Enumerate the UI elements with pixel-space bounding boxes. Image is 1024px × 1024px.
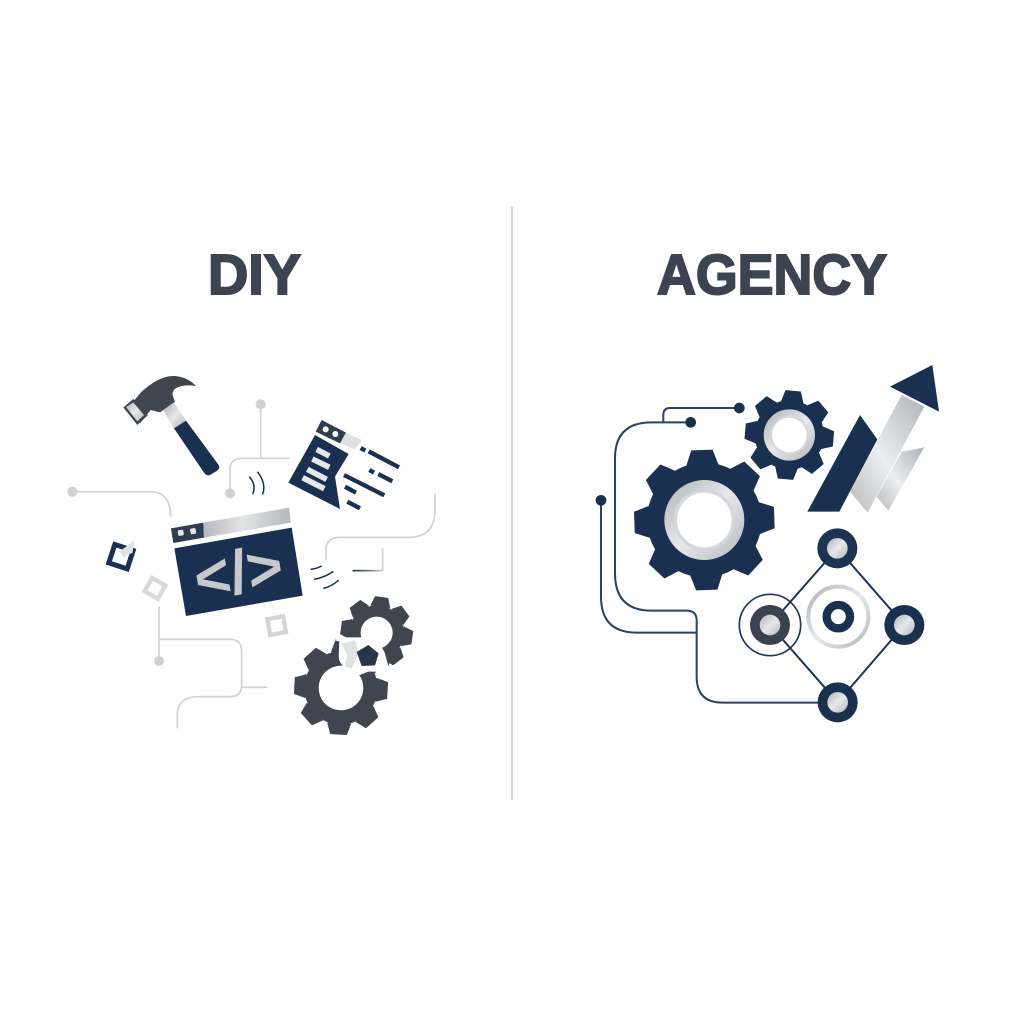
icon: growth arrow bbox=[807, 365, 939, 513]
panel: DIY illustration bbox=[67, 376, 435, 737]
network nodes bbox=[750, 528, 924, 722]
icon: large gear bbox=[632, 448, 777, 592]
heading: AGENCY: AGENCY bbox=[657, 243, 887, 307]
heading: DIY: DIY bbox=[208, 243, 301, 307]
network diagram bbox=[739, 528, 924, 722]
icon: broken gears bbox=[292, 592, 417, 737]
center target bbox=[808, 587, 868, 647]
icon: small gear bbox=[741, 387, 837, 483]
panel: Agency illustration bbox=[596, 365, 939, 722]
small gear bbox=[336, 592, 417, 673]
icon: code browser window bbox=[171, 508, 303, 616]
icon: code document bbox=[288, 420, 399, 509]
sound and motion marks bbox=[249, 472, 339, 588]
icon: hammer bbox=[123, 376, 219, 475]
icon: silver squares bbox=[145, 578, 286, 635]
gear fragments bbox=[342, 640, 359, 668]
icon: navy checkbox bbox=[109, 540, 134, 569]
large gear bbox=[292, 639, 390, 737]
navy circuit lines bbox=[596, 403, 820, 703]
icon: code browser window: </> bbox=[189, 531, 288, 615]
divider bbox=[511, 207, 513, 800]
grey circuit lines bbox=[67, 399, 435, 728]
crack bbox=[339, 637, 391, 675]
